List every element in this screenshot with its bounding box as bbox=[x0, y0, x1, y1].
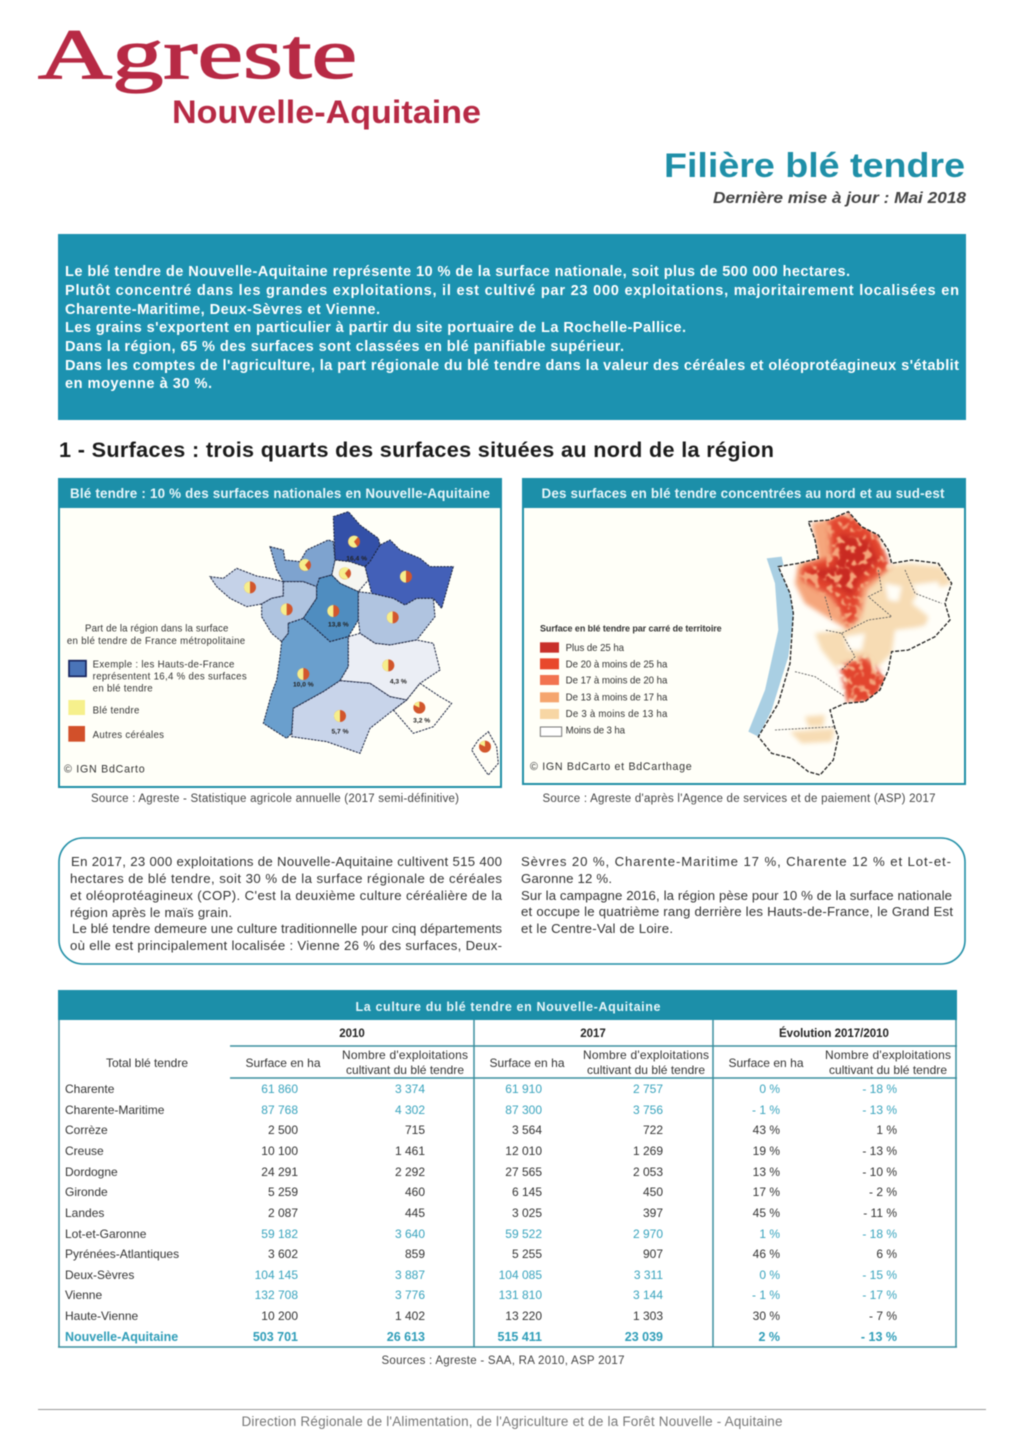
row: Dordogne: 13 % bbox=[753, 1165, 780, 1179]
row: Charente-Maritime: - 1 % bbox=[752, 1103, 780, 1117]
row: Corrèze: 3 564 bbox=[512, 1123, 542, 1137]
logo: Agreste: Agreste bbox=[38, 16, 357, 94]
row: Haute-Vienne: 10 200 bbox=[261, 1309, 298, 1323]
row: Nouvelle-Aquitaine total: Nouvelle-Aquitaine bbox=[65, 1330, 178, 1344]
panel: summary: Les grains s'exportent en particulier à partir du site portuaire de La Rochelle-Pallice. bbox=[65, 320, 686, 336]
row: Creuse bbox=[65, 1144, 897, 1158]
panel: commentary text: Sur la campagne 2016, la région pèse pour 10 % de la surface nationale bbox=[521, 888, 952, 903]
row: Deux-Sèvres: 3 887 bbox=[395, 1268, 425, 1282]
row: Lot-et-Garonne: 59 522 bbox=[505, 1227, 542, 1241]
row: Creuse: 19 % bbox=[753, 1144, 780, 1158]
footer: Direction Régionale de l'Alimentation, de l'Agriculture et de la Forêt Nouvelle - Aquitaine bbox=[242, 1414, 782, 1429]
row: Vienne bbox=[65, 1288, 897, 1302]
source: France map: Source : Agreste - Statistique agricole annuelle (2017 semi-définitive) bbox=[91, 793, 459, 805]
title: Filière blé tendre bbox=[664, 147, 965, 185]
row: Dordogne: 2 292 bbox=[395, 1165, 425, 1179]
legend: regional map: © IGN BdCarto et BdCarthage bbox=[530, 761, 692, 773]
row: Deux-Sèvres: - 15 % bbox=[862, 1268, 897, 1282]
legend: France map: Part de la région dans la surface bbox=[85, 623, 228, 634]
panel: commentary text: où elle est principalement localisée : Vienne 26 % des surfaces, Deux- bbox=[70, 938, 502, 953]
row: Corrèze: 722 bbox=[643, 1123, 663, 1137]
row: Haute-Vienne bbox=[65, 1309, 897, 1323]
row: Vienne: Vienne bbox=[65, 1288, 102, 1302]
panel: regional map bbox=[522, 478, 966, 784]
choropleth map of France: 13,8 % bbox=[328, 622, 349, 629]
row: Lot-et-Garonne: 59 182 bbox=[261, 1227, 298, 1241]
panel: summary: Dans les comptes de l'agriculture, la part régionale du blé tendre dans la valeur des céréales et oléoprotéagineux s'établit bbox=[65, 358, 959, 374]
row: Vienne: 3 776 bbox=[395, 1288, 425, 1302]
row: Nouvelle-Aquitaine total: 503 701 bbox=[253, 1330, 298, 1344]
row: Haute-Vienne: 1 402 bbox=[395, 1309, 425, 1323]
row: Pyrénées-Atlantiques: Pyrénées-Atlantiques bbox=[65, 1247, 179, 1261]
row: Deux-Sèvres: 104 085 bbox=[499, 1268, 542, 1282]
choropleth map of France: 10,0 % bbox=[293, 682, 314, 689]
row: Corrèze: 715 bbox=[405, 1123, 425, 1137]
table column headers: cultivant du blé tendre bbox=[587, 1063, 705, 1077]
row: Vienne: - 1 % bbox=[752, 1288, 780, 1302]
row: Haute-Vienne: 1 303 bbox=[633, 1309, 663, 1323]
update date: Dernière mise à jour : Mai 2018 bbox=[713, 190, 966, 207]
row: Haute-Vienne: - 7 % bbox=[869, 1309, 897, 1323]
table column headers: Surface en ha bbox=[490, 1056, 565, 1070]
row: Nouvelle-Aquitaine total: 26 613 bbox=[387, 1330, 425, 1344]
row: Dordogne: - 10 % bbox=[862, 1165, 897, 1179]
row: Nouvelle-Aquitaine total: 515 411 bbox=[498, 1330, 542, 1344]
choropleth map of France: 16,4 % bbox=[346, 556, 367, 563]
heat map of Nouvelle-Aquitaine bbox=[745, 507, 958, 780]
row: Charente bbox=[65, 1082, 897, 1096]
choropleth map of France bbox=[210, 512, 498, 775]
panel: commentary text: Sèvres 20 %, Charente-Maritime 17 %, Charente 12 % et Lot-et- bbox=[521, 854, 951, 869]
row: Landes: 397 bbox=[643, 1206, 663, 1220]
row: Corrèze: Corrèze bbox=[65, 1123, 108, 1137]
row: Creuse: 1 461 bbox=[395, 1144, 425, 1158]
panel: commentary text: hectares de blé tendre, soit 30 % de la surface régionale de céréales bbox=[70, 871, 502, 886]
row: Charente-Maritime: - 13 % bbox=[862, 1103, 897, 1117]
table column headers: Surface en ha bbox=[728, 1056, 804, 1070]
row: Landes: 445 bbox=[405, 1206, 425, 1220]
panel: France map bbox=[58, 478, 502, 787]
row: Haute-Vienne: 13 220 bbox=[505, 1309, 542, 1323]
row: Gironde: 450 bbox=[643, 1185, 663, 1199]
row: Deux-Sèvres: 3 311 bbox=[634, 1268, 663, 1282]
table column headers: 2017 bbox=[580, 1028, 606, 1040]
legend: France map: en blé tendre bbox=[93, 684, 153, 695]
row: Pyrénées-Atlantiques: 859 bbox=[405, 1247, 425, 1261]
panel: summary: en moyenne à 30 %. bbox=[65, 376, 212, 392]
legend: regional map: De 20 à moins de 25 ha bbox=[566, 659, 668, 670]
legend: regional map: De 17 à moins de 20 ha bbox=[566, 675, 668, 686]
row: Nouvelle-Aquitaine total: - 13 % bbox=[861, 1330, 897, 1344]
panel heading: France map: Blé tendre : 10 % des surfaces nationales en Nouvelle-Aquitaine bbox=[70, 486, 490, 501]
row: Charente-Maritime bbox=[65, 1103, 897, 1117]
panel: commentary text: Le blé tendre demeure une culture traditionnelle pour cinq départements bbox=[72, 921, 502, 936]
row: Lot-et-Garonne: 2 970 bbox=[633, 1227, 663, 1241]
row: Charente: 61 910 bbox=[505, 1082, 542, 1096]
row: Corrèze: 43 % bbox=[753, 1123, 780, 1137]
panel: commentary text: En 2017, 23 000 exploitations de Nouvelle-Aquitaine cultivent 515 400 bbox=[71, 854, 502, 869]
legend: France map: en blé tendre de France métropolitaine bbox=[67, 636, 245, 647]
row: Deux-Sèvres: 104 145 bbox=[255, 1268, 298, 1282]
row: Landes: 2 087 bbox=[268, 1206, 298, 1220]
row: Charente: - 18 % bbox=[862, 1082, 897, 1096]
row: Creuse: 1 269 bbox=[633, 1144, 663, 1158]
legend: France map: Blé tendre bbox=[93, 705, 139, 716]
row: Lot-et-Garonne: Lot-et-Garonne bbox=[65, 1227, 147, 1241]
row: Charente: 3 374 bbox=[395, 1082, 425, 1096]
panel: summary: Charente-Maritime, Deux-Sèvres et Vienne. bbox=[65, 302, 380, 318]
legend: France map bbox=[64, 623, 247, 775]
table title: La culture du blé tendre en Nouvelle-Aquitaine bbox=[356, 1000, 661, 1014]
row: Charente: 61 860 bbox=[261, 1082, 298, 1096]
row: Charente-Maritime: Charente-Maritime bbox=[65, 1103, 165, 1117]
legend: France map: Exemple : les Hauts-de-France bbox=[93, 659, 234, 670]
table column headers: Nombre d'exploitations bbox=[342, 1048, 468, 1062]
table column headers: cultivant du blé tendre bbox=[346, 1063, 464, 1077]
panel: summary: Dans la région, 65 % des surfaces sont classées en blé panifiable supérieur. bbox=[65, 339, 624, 355]
row: Gironde: 5 259 bbox=[268, 1185, 298, 1199]
row: Pyrénées-Atlantiques: 907 bbox=[643, 1247, 663, 1261]
legend: France map: représentent 16,4 % des surfaces bbox=[93, 671, 247, 682]
row: Creuse: - 13 % bbox=[862, 1144, 897, 1158]
row: Corrèze: 2 500 bbox=[268, 1123, 298, 1137]
row: Deux-Sèvres: 0 % bbox=[759, 1268, 780, 1282]
table column headers: Surface en ha bbox=[246, 1056, 321, 1070]
panel: commentary text: Garonne 12 %. bbox=[521, 871, 612, 886]
row: Vienne: 3 144 bbox=[633, 1288, 663, 1302]
table column headers: Nombre d'exploitations bbox=[583, 1048, 709, 1062]
row: Nouvelle-Aquitaine total bbox=[65, 1330, 897, 1344]
row: Pyrénées-Atlantiques: 5 255 bbox=[512, 1247, 542, 1261]
row: Nouvelle-Aquitaine total: 2 % bbox=[758, 1330, 780, 1344]
row: Creuse: 10 100 bbox=[261, 1144, 298, 1158]
table column headers: cultivant du blé tendre bbox=[829, 1063, 947, 1077]
row: Dordogne: Dordogne bbox=[65, 1165, 118, 1179]
row: Deux-Sèvres: Deux-Sèvres bbox=[65, 1268, 134, 1282]
legend: regional map: Plus de 25 ha bbox=[566, 643, 625, 654]
legend: regional map: Moins de 3 ha bbox=[566, 725, 626, 736]
legend: regional map bbox=[530, 624, 722, 773]
row: Dordogne bbox=[65, 1165, 897, 1179]
row: Pyrénées-Atlantiques bbox=[65, 1247, 897, 1261]
panel: summary bbox=[58, 234, 966, 420]
row: Landes: 3 025 bbox=[512, 1206, 542, 1220]
row: Landes: 45 % bbox=[753, 1206, 780, 1220]
row: Pyrénées-Atlantiques: 3 602 bbox=[268, 1247, 298, 1261]
row: Landes: Landes bbox=[65, 1206, 104, 1220]
panel: commentary text bbox=[59, 838, 965, 964]
row: Dordogne: 24 291 bbox=[261, 1165, 298, 1179]
row: Lot-et-Garonne: - 18 % bbox=[862, 1227, 897, 1241]
row: Vienne: - 17 % bbox=[862, 1288, 897, 1302]
section heading: 1 - Surfaces : trois quarts des surfaces situées au nord de la région bbox=[59, 437, 774, 462]
row: Charente: 2 757 bbox=[633, 1082, 663, 1096]
panel heading: regional map: Des surfaces en blé tendre concentrées au nord et au sud-est bbox=[542, 486, 945, 501]
table column headers: Total blé tendre bbox=[106, 1056, 188, 1070]
panel: commentary text: région après le maïs grain. bbox=[70, 905, 232, 920]
row: Charente-Maritime: 4 302 bbox=[395, 1103, 425, 1117]
row: Landes: - 11 % bbox=[863, 1206, 897, 1220]
row: Charente-Maritime: 87 300 bbox=[505, 1103, 542, 1117]
row: Lot-et-Garonne: 1 % bbox=[759, 1227, 780, 1241]
row: Haute-Vienne: Haute-Vienne bbox=[65, 1309, 138, 1323]
table column headers: 2010 bbox=[339, 1028, 365, 1040]
source: regional map: Source : Agreste d'après l'Agence de services et de paiement (ASP) 2017 bbox=[542, 793, 936, 805]
data table bbox=[58, 990, 957, 1347]
legend: France map: © IGN BdCarto bbox=[64, 763, 145, 775]
choropleth map of France: 3,2 % bbox=[413, 717, 430, 724]
row: Dordogne: 2 053 bbox=[633, 1165, 663, 1179]
row: Lot-et-Garonne: 3 640 bbox=[395, 1227, 425, 1241]
row: Vienne: 131 810 bbox=[499, 1288, 542, 1302]
row: Gironde: 17 % bbox=[753, 1185, 780, 1199]
panel: commentary text: et occupe le quatrième rang derrière les Hauts-de-France, le Grand Est bbox=[521, 904, 953, 919]
logo subtitle: Nouvelle-Aquitaine: Nouvelle-Aquitaine bbox=[172, 94, 481, 130]
row: Lot-et-Garonne bbox=[65, 1227, 897, 1241]
row: Gironde: - 2 % bbox=[869, 1185, 897, 1199]
row: Deux-Sèvres bbox=[65, 1268, 897, 1282]
row: Nouvelle-Aquitaine total: 23 039 bbox=[625, 1330, 663, 1344]
table column headers: Évolution 2017/2010 bbox=[779, 1027, 889, 1040]
row: Gironde: 460 bbox=[405, 1185, 425, 1199]
table column headers bbox=[106, 1027, 951, 1077]
row: Charente: 0 % bbox=[759, 1082, 780, 1096]
row: Charente-Maritime: 87 768 bbox=[261, 1103, 298, 1117]
row: Gironde: Gironde bbox=[65, 1185, 108, 1199]
legend: France map: Autres céréales bbox=[93, 730, 164, 741]
panel: summary: Plutôt concentré dans les grandes exploitations, il est cultivé par 23 000 exploitations, majoritairement localisées en bbox=[65, 283, 959, 299]
panel: commentary text: et oléoprotéagineux (COP). C'est la deuxième culture céréalière de la bbox=[70, 888, 503, 903]
choropleth map of France: 4,3 % bbox=[390, 678, 407, 685]
source: table: Sources : Agreste - SAA, RA 2010, ASP 2017 bbox=[382, 1355, 624, 1367]
row: Charente-Maritime: 3 756 bbox=[633, 1103, 663, 1117]
row: Corrèze: 1 % bbox=[876, 1123, 897, 1137]
row: Corrèze bbox=[65, 1123, 897, 1137]
legend: regional map: De 13 à moins de 17 ha bbox=[566, 693, 668, 704]
panel: commentary text: et le Centre-Val de Loire. bbox=[521, 921, 673, 936]
row: Gironde: 6 145 bbox=[512, 1185, 542, 1199]
row: Vienne: 132 708 bbox=[255, 1288, 298, 1302]
row: Creuse: Creuse bbox=[65, 1144, 104, 1158]
row: Gironde bbox=[65, 1185, 897, 1199]
legend: regional map: De 3 à moins de 13 ha bbox=[566, 709, 668, 720]
choropleth map of France: 5,7 % bbox=[331, 728, 349, 735]
row: Charente: Charente bbox=[65, 1082, 115, 1096]
row: Haute-Vienne: 30 % bbox=[753, 1309, 780, 1323]
panel: summary: Le blé tendre de Nouvelle-Aquitaine représente 10 % de la surface nationale, soit plus de 500 000 hectares. bbox=[65, 264, 850, 280]
row: Creuse: 12 010 bbox=[505, 1144, 542, 1158]
row: Pyrénées-Atlantiques: 6 % bbox=[876, 1247, 897, 1261]
legend: regional map: Surface en blé tendre par carré de territoire bbox=[540, 624, 722, 634]
row: Landes bbox=[65, 1206, 897, 1220]
table column headers: Nombre d'exploitations bbox=[825, 1048, 951, 1062]
row: Dordogne: 27 565 bbox=[505, 1165, 542, 1179]
row: Pyrénées-Atlantiques: 46 % bbox=[753, 1247, 780, 1261]
